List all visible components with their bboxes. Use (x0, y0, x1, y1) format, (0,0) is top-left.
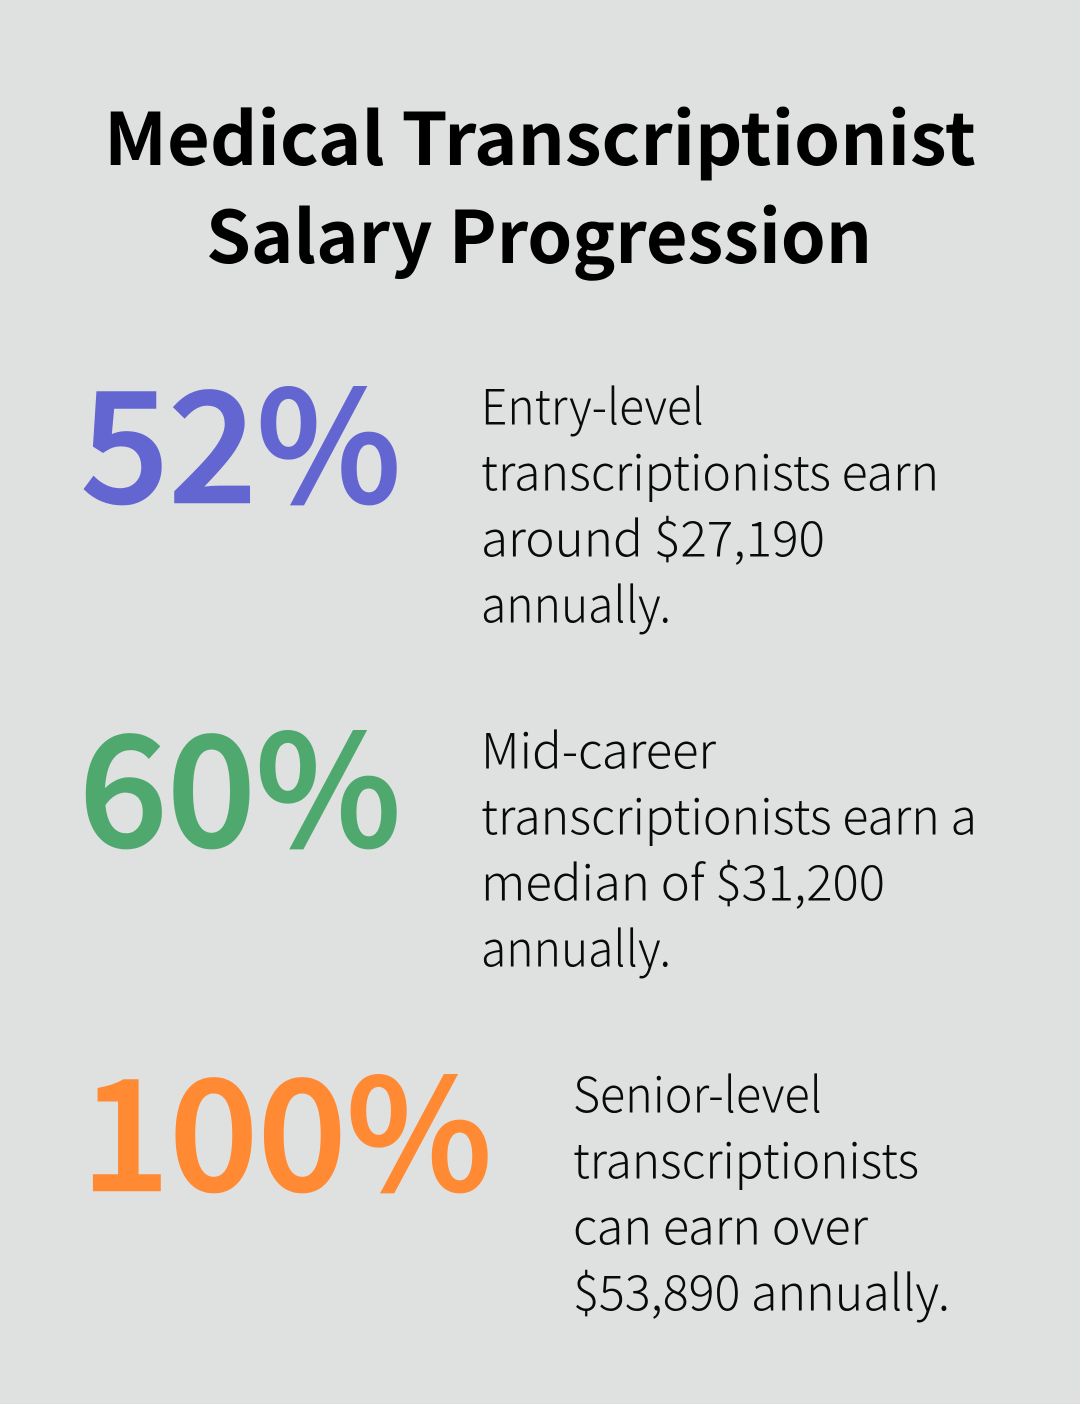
text: entry-level description: Entry-level (481, 368, 704, 440)
text: mid-career description: Mid-career (481, 712, 716, 784)
text: entry-level description: around $27,190 (481, 500, 825, 572)
stat: 100% senior-level (81, 1014, 950, 1326)
number: 52%: 52% (81, 326, 401, 547)
title: Medical Transcriptionist (104, 81, 976, 186)
text: senior-level description: $53,890 annually. (573, 1254, 950, 1326)
title (104, 81, 976, 284)
text: senior-level description: transcriptionists (573, 1122, 919, 1194)
text: mid-career description: median of $31,200 (481, 844, 885, 916)
text: entry-level description (481, 368, 939, 638)
title: Salary Progression (206, 179, 872, 284)
number: 100%: 100% (81, 1014, 492, 1235)
text: entry-level description: annually. (481, 566, 671, 638)
text: mid-career description (481, 712, 977, 982)
text: mid-career description: transcriptionists earn a (481, 778, 977, 850)
text: mid-career description: annually. (481, 910, 671, 982)
text: entry-level description: transcriptionists earn (481, 434, 939, 506)
number: 60%: 60% (79, 670, 401, 891)
text: senior-level description: can earn over (573, 1188, 868, 1260)
text: senior-level description (573, 1056, 950, 1326)
stat: 60% mid-career (79, 670, 977, 982)
text: senior-level description: Senior-level (573, 1056, 822, 1128)
stat: 52% entry-level (81, 326, 939, 638)
